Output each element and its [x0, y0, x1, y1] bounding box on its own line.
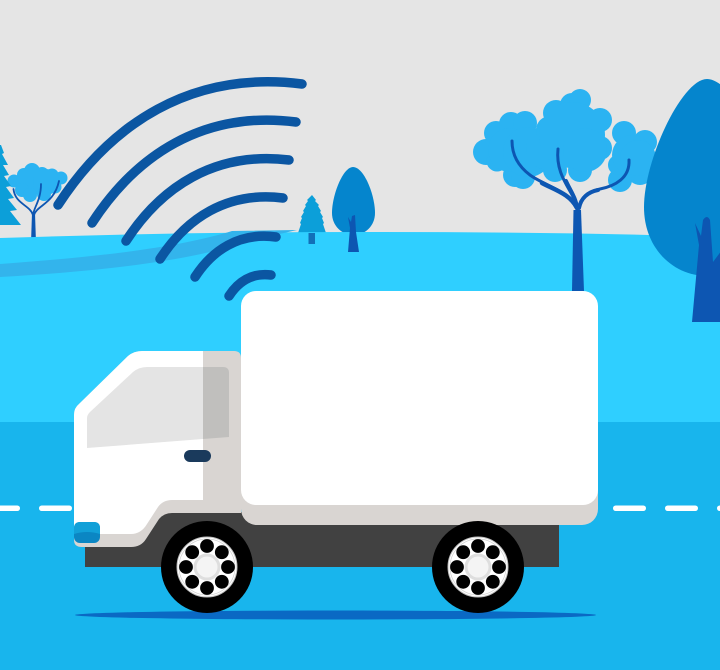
cargo box underside: [241, 440, 598, 525]
road dashes: [0, 506, 720, 511]
rear wheel: [432, 521, 524, 613]
tree: big cloud tree crown: [473, 89, 657, 192]
cab white door panel: [74, 351, 203, 534]
tree: big cloud tree trunk and branches: [512, 141, 629, 291]
road: [0, 422, 720, 670]
small pine trunk: [308, 233, 315, 244]
tree: left pine: [0, 145, 21, 225]
ground shadow: [75, 610, 596, 620]
cab body shade: [74, 351, 241, 547]
front wheel: [161, 521, 253, 613]
truck: [74, 291, 598, 613]
tree: big right tree: [644, 79, 720, 322]
door handle: [184, 450, 211, 462]
wireless signal arcs: [58, 82, 302, 296]
tree: small left cloud tree: [8, 163, 68, 243]
cab window: [87, 367, 203, 448]
headlight: [74, 522, 100, 543]
chassis: [85, 512, 559, 567]
tree: small pine: [298, 195, 326, 233]
cab window shaded pillar: [203, 367, 229, 439]
egg tree trunk: [348, 215, 359, 252]
tree: egg tree crown: [332, 167, 375, 235]
cargo box: [241, 291, 598, 505]
hill: [0, 232, 720, 430]
hill path: [0, 230, 297, 277]
